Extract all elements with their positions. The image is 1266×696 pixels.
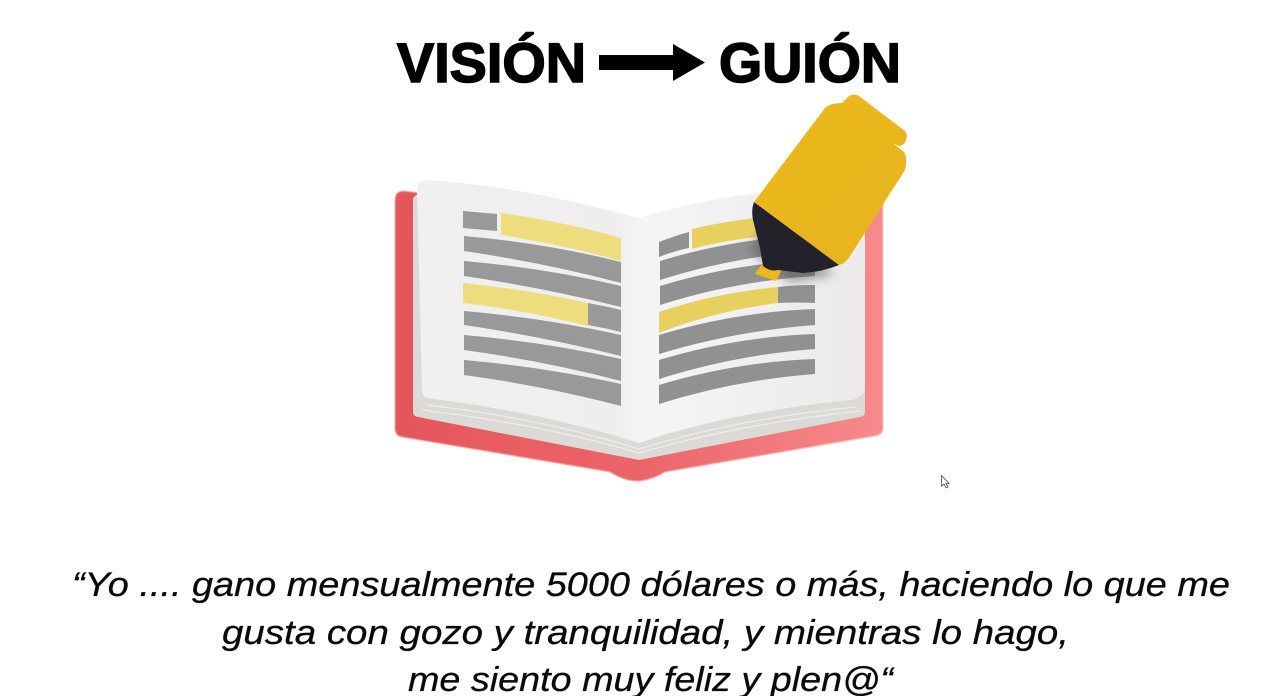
right page highlights [659,217,778,333]
quote text: gusta con gozo y tranquilidad, y mientras lo hago, [222,614,1069,652]
marker shadow [750,225,835,282]
mouse cursor [942,476,949,488]
marker body [754,94,907,265]
left page text lines [463,211,621,406]
quote text [72,566,1230,696]
heading: GUIÓN: GUIÓN [719,31,901,94]
page stack [413,185,865,460]
right page text lines [659,232,815,404]
book cover [395,191,883,481]
title [397,31,901,94]
quote text: “Yo .... gano mensualmente 5000 dólares o más, haciendo lo que me [72,566,1230,604]
marker dark tip [752,202,839,273]
illustration: open book with highlighter [395,94,907,481]
highlighter marker [752,94,907,281]
marker nib [755,264,784,281]
arrow [599,44,705,81]
book pages [417,180,865,443]
heading: VISIÓN: VISIÓN [397,31,586,94]
left page highlights [463,213,621,326]
